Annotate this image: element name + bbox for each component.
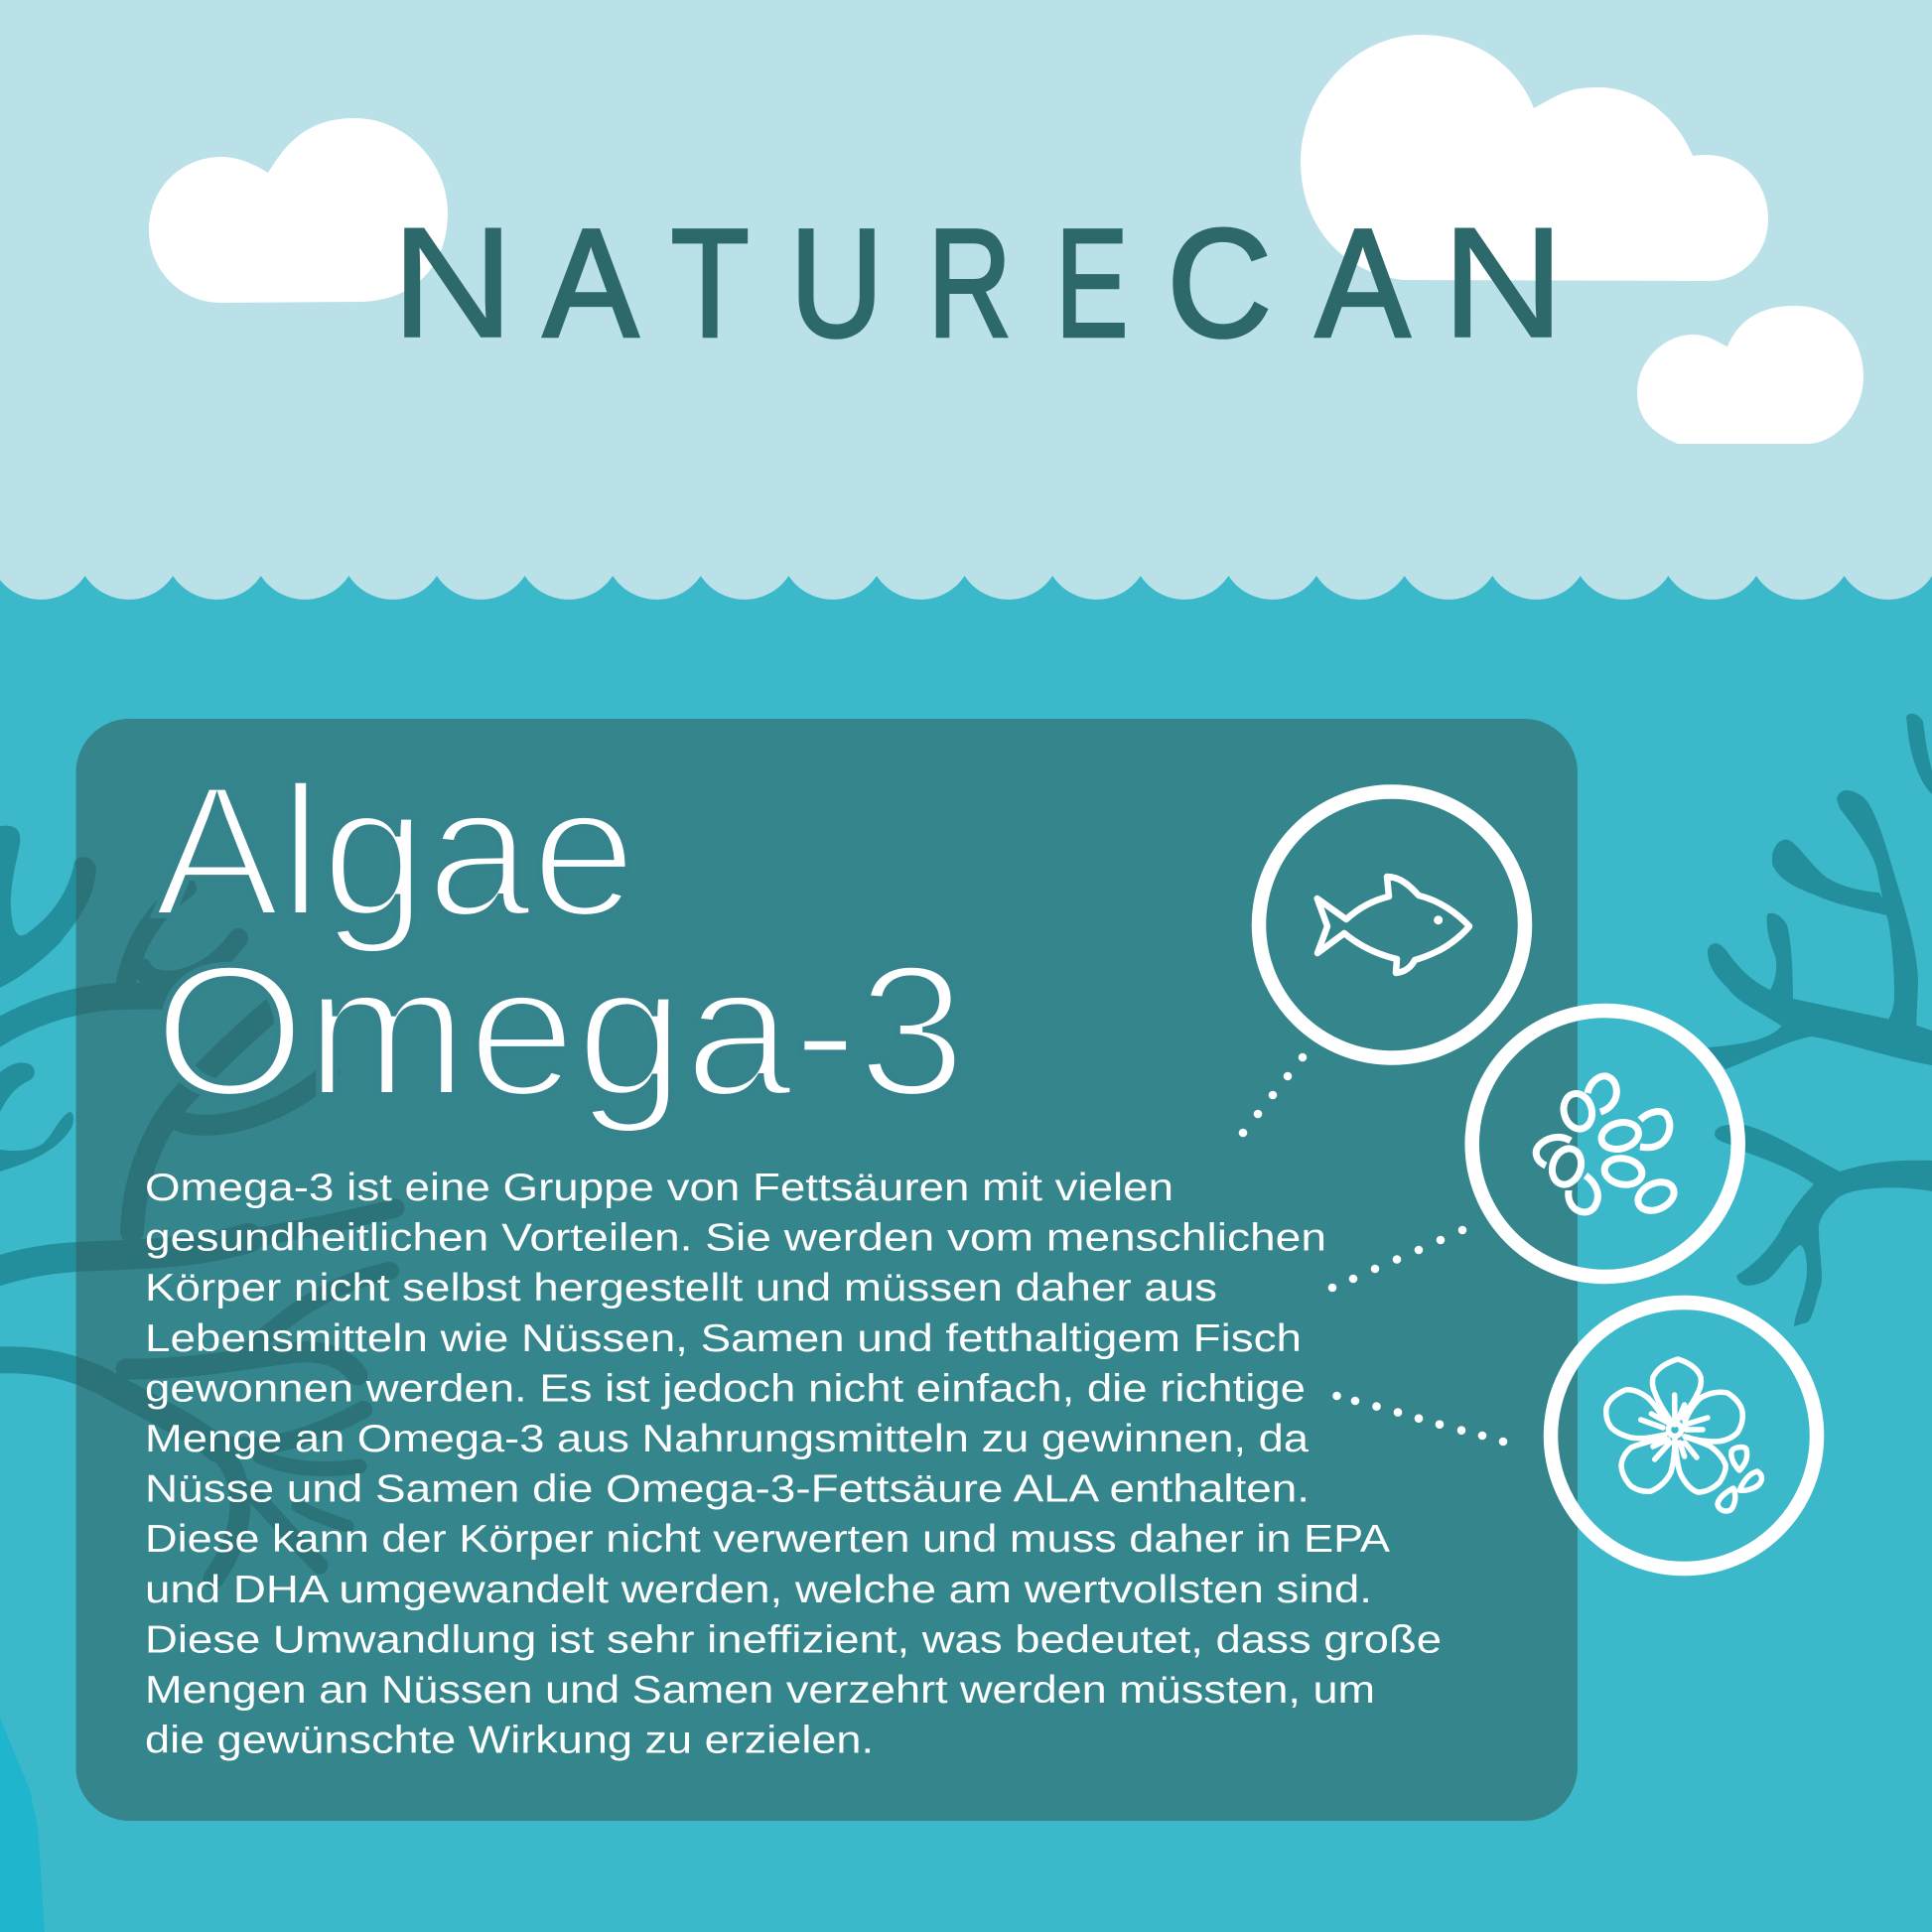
logo: NATURECAN: A (1315, 197, 1410, 369)
cloud large right (1301, 35, 1768, 281)
body text: Diese Umwandlung ist sehr ineffizient, was bedeutet, dass große (145, 1618, 1442, 1661)
logo: NATURECAN: U (790, 198, 883, 369)
logo: NATURECAN: N (1442, 195, 1565, 370)
heading: Algae Omega-3: Omega-3 (154, 926, 966, 1135)
body text: und DHA umgewandelt werden, welche am wertvollsten sind. (145, 1569, 1372, 1611)
body text: gesundheitlichen Vorteilen. Sie werden vom menschlichen (145, 1217, 1326, 1260)
seaweed: left tree (0, 826, 395, 1579)
logo: NATURECAN: C (1168, 197, 1272, 368)
body text (145, 1167, 1442, 1762)
seaweed: bottom-left bright shape (0, 1718, 45, 1932)
dotted connector: flower (1332, 1392, 1507, 1446)
body text: Lebensmitteln wie Nüssen, Samen und fetthaltigem Fisch (145, 1317, 1302, 1360)
logo: NATURECAN: T (671, 198, 750, 369)
body text: Mengen an Nüssen und Samen verzehrt werden müssten, um (145, 1669, 1375, 1712)
cloud left (149, 118, 448, 303)
heading: Algae Omega-3: Algae (154, 747, 636, 955)
icon: flower with seeds (1606, 1359, 1761, 1511)
dotted connector: seeds (1328, 1226, 1466, 1292)
body text: Diese kann der Körper nicht verwerten und muss daher in EPA (145, 1518, 1390, 1561)
logo: NATURECAN: A (543, 197, 638, 369)
body text: Omega-3 ist eine Gruppe von Fettsäuren mit vielen (145, 1167, 1173, 1209)
icon: seeds (1536, 1076, 1679, 1216)
dotted connector: fish (1239, 1053, 1307, 1137)
seaweed: right tree (1708, 714, 1932, 1326)
body text: Körper nicht selbst hergestellt und müssen daher aus (145, 1267, 1217, 1310)
panel: main text card (75, 719, 1578, 1821)
body text: Nüsse und Samen die Omega-3-Fettsäure ALA enthalten. (145, 1468, 1310, 1511)
heading: Algae Omega-3 (154, 747, 966, 1135)
logo: NATURECAN: N (391, 195, 514, 370)
icon: fish (1317, 877, 1469, 973)
body text: Menge an Omega-3 aus Nahrungsmitteln zu gewinnen, da (145, 1418, 1309, 1460)
body text: gewonnen werden. Es ist jedoch nicht einfach, die richtige (145, 1367, 1306, 1410)
logo: NATURECAN (391, 195, 1565, 370)
circle: flower (1551, 1303, 1817, 1569)
cloud small right (1637, 306, 1863, 444)
circle: fish (1259, 792, 1525, 1058)
circle: seeds (1472, 1011, 1738, 1277)
body text: die gewünschte Wirkung zu erzielen. (145, 1720, 874, 1762)
logo: NATURECAN: R (927, 199, 1012, 369)
logo: NATURECAN: E (1055, 198, 1128, 369)
sky with scalloped wave edge (0, 0, 1932, 600)
